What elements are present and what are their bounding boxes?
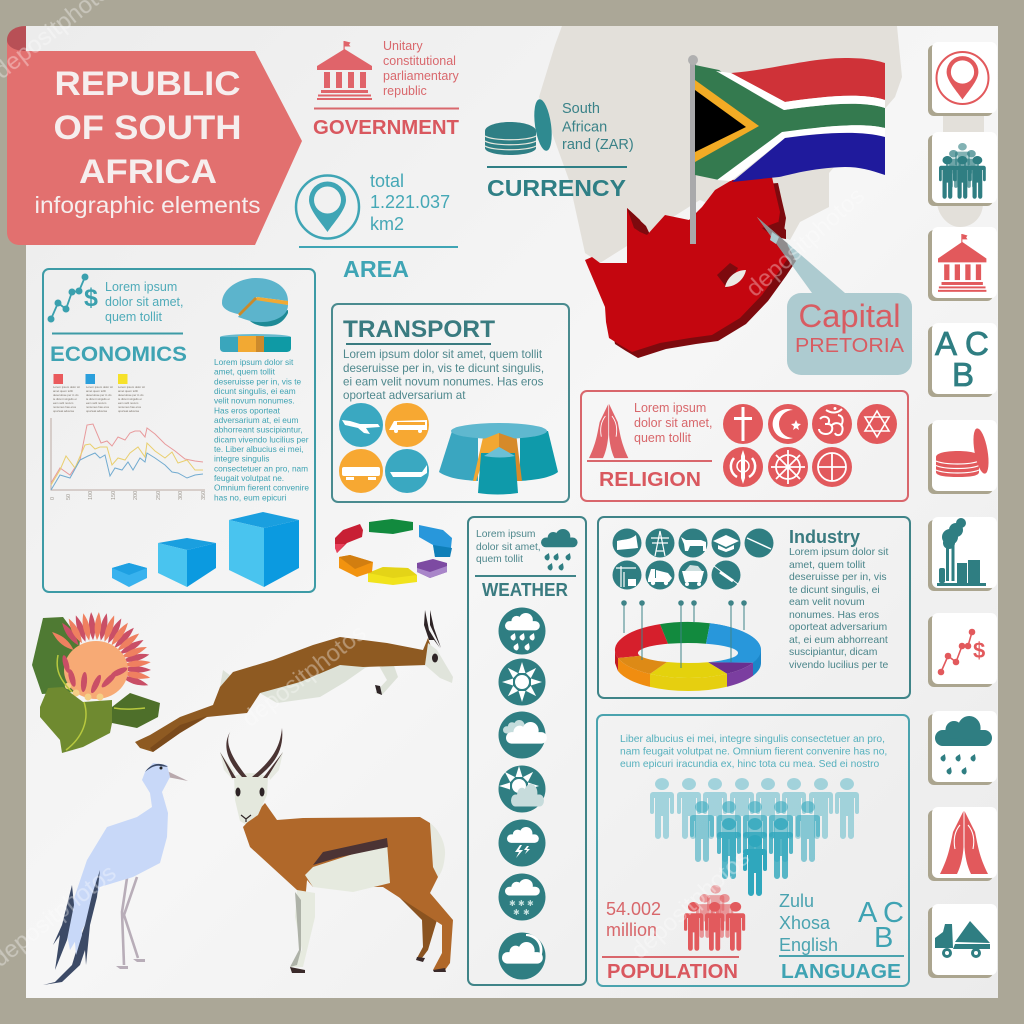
economics body text: deseruisse per in, vis te	[214, 376, 302, 386]
icon: growth graph with dollar	[48, 274, 98, 322]
icon: snow: ✱	[523, 908, 530, 917]
icon: red people	[684, 885, 745, 951]
callout: capital Pretoria	[757, 217, 912, 375]
chart legend: te dicunt singulis ei	[53, 397, 77, 401]
side tab: economics	[928, 613, 997, 687]
drum diagram	[439, 423, 558, 494]
economics body text: amet, quem tollit	[214, 367, 276, 377]
side tab: government	[928, 227, 997, 301]
icon: circle cross	[812, 447, 852, 487]
population text: eum epicuri iracundia ex, hinc tota cu mea. Sed ei nostro	[620, 759, 880, 770]
heading: religion: RELIGION	[599, 469, 701, 491]
heading: government: GOVERNMENT	[313, 117, 459, 139]
economics body text: Has eros oporteat	[214, 405, 281, 415]
economics body text: integre singulis	[214, 454, 269, 464]
heading: language: LANGUAGE	[781, 961, 901, 983]
icon: power pylon	[646, 528, 674, 558]
economics body text: has no, eum epicuri	[214, 492, 287, 502]
heading: industry: Industry	[789, 527, 860, 547]
currency description: African	[562, 120, 607, 136]
line chart: 350	[201, 491, 207, 500]
grey map of southern Africa	[539, 26, 984, 263]
title banner: REPUBLIC	[54, 65, 240, 103]
side tab: language: C	[965, 325, 989, 362]
icon: snow: ✱	[509, 899, 516, 908]
economics body text: Omnium fierent convenire	[214, 483, 309, 493]
heading: currency: CURRENCY	[487, 175, 626, 201]
line chart: 0	[50, 497, 56, 500]
callout: capital Pretoria: PRETORIA	[795, 335, 905, 357]
standing springbok	[220, 728, 453, 973]
title banner: AFRICA	[79, 153, 217, 191]
heading: transport: TRANSPORT	[343, 316, 495, 343]
line chart: 150	[111, 491, 117, 500]
chart legend: amet quem tollit	[118, 389, 138, 393]
heading: area: AREA	[343, 256, 409, 282]
industry text: deseruisse per in, vis	[789, 572, 887, 583]
economics body text: te. Liber albucius ei mei,	[214, 444, 303, 454]
side tab: language: B	[952, 356, 974, 393]
icon: growth graph with dollar: $	[84, 284, 98, 312]
government description: republic	[383, 84, 427, 98]
icon: khanda	[723, 447, 763, 487]
industry text: at, ei eum abhorreant	[789, 635, 888, 646]
industry text: te dicunt singulis, ei	[789, 585, 880, 596]
industry text: nonumes. Has eros	[789, 610, 879, 621]
heading: weather: WEATHER	[482, 580, 568, 600]
icon: om	[812, 404, 852, 444]
icon: airplane	[339, 403, 383, 447]
chart legend: eam velit novum	[86, 401, 107, 405]
chart legend: amet quem tollit	[86, 389, 106, 393]
icon: syringe	[712, 560, 740, 590]
side tab: area	[928, 42, 997, 116]
industry text: oporteat adversarium	[789, 622, 887, 633]
line chart	[50, 418, 207, 500]
icon: crescent and star	[768, 404, 808, 444]
icon: location pin	[296, 176, 359, 238]
icon: graduation cap	[712, 528, 740, 558]
watermarks: depositphotos	[741, 182, 870, 302]
icon: snow: ✱	[527, 899, 534, 908]
currency description: rand (ZAR)	[562, 137, 634, 153]
title banner: infographic elements	[34, 192, 260, 218]
icon: dump truck	[646, 560, 674, 590]
economics body text: dicunt singulis, ei eam	[214, 386, 296, 396]
chart legend: eam velit novum	[53, 401, 74, 405]
icon: letters A C B: C	[883, 897, 904, 929]
icon: star of David	[857, 404, 897, 444]
area value: km2	[370, 214, 404, 234]
side tab: religion	[928, 807, 997, 881]
icon: snow: ✱	[513, 908, 520, 917]
chart legend: nonumes has eros	[86, 405, 110, 409]
icon: thunderstorm	[498, 820, 546, 866]
panel: weather	[468, 517, 586, 985]
3D cube bars	[112, 512, 299, 587]
religion text: Lorem ipsum	[634, 401, 706, 415]
religion text: dolor sit amet,	[634, 416, 713, 430]
side tab: currency	[928, 420, 997, 494]
line chart: 300	[178, 491, 184, 500]
economics body text: adversarium at, ei eum	[214, 415, 298, 425]
icon: coins	[485, 98, 555, 155]
panel: transport	[332, 304, 569, 502]
blue crane	[43, 763, 188, 985]
weather intro text: dolor sit amet,	[476, 542, 541, 553]
side tab: language	[928, 323, 997, 397]
chart legend: nonumes has eros	[118, 405, 142, 409]
weather intro text: Lorem ipsum	[476, 529, 536, 540]
economics intro text: dolor sit amet,	[105, 295, 184, 309]
icon: rain	[498, 608, 546, 654]
icon: snow: ✱	[518, 899, 525, 908]
pins	[622, 601, 746, 668]
panel: economics	[43, 269, 315, 592]
chart legend	[53, 374, 145, 413]
economics intro text: Lorem ipsum	[105, 280, 177, 294]
icon: dharma wheel	[768, 447, 808, 487]
economics body text: consectetuer an pro, nam	[214, 463, 308, 473]
currency description: South	[562, 101, 600, 117]
economics body text: velit novum nonumes.	[214, 396, 295, 406]
transport text: oporteat adversarium at	[343, 389, 466, 402]
line chart: 50	[66, 494, 72, 500]
title banner	[7, 26, 302, 245]
people pyramid	[650, 778, 859, 896]
government description: Unitary	[383, 39, 423, 53]
government block	[313, 39, 459, 139]
side tab: weather	[928, 711, 997, 785]
watermarks: depositphotos	[626, 844, 755, 964]
side tab: mining truck	[928, 904, 997, 978]
industry text: amet, quem tollit	[789, 560, 865, 571]
icon: bus	[385, 403, 429, 447]
chart legend: eam velit novum	[118, 401, 139, 405]
population number: 54.002	[606, 899, 661, 919]
flagpole	[688, 55, 698, 244]
flower: king protea	[32, 612, 160, 753]
religion text: quem tollit	[634, 431, 691, 445]
weather intro text: quem tollit	[476, 554, 523, 565]
area value: total	[370, 171, 404, 191]
3D ring chart	[615, 601, 761, 691]
icon: letters A C B: B	[874, 922, 893, 954]
panel: population and language	[597, 715, 909, 986]
heading: population: POPULATION	[607, 961, 738, 983]
panel: industry	[598, 517, 910, 698]
population text: nam feugait volutpat ne. Omnium fierent convenire has no,	[620, 746, 887, 758]
leaping springbok	[135, 610, 453, 752]
language list: Zulu	[779, 891, 814, 911]
chart legend: amet quem tollit	[53, 389, 73, 393]
chart legend: nonumes has eros	[53, 405, 77, 409]
side tab: population	[928, 132, 997, 206]
icon: sun and cloud	[498, 766, 546, 812]
pie chart	[222, 278, 288, 326]
side tab: language: A	[935, 325, 957, 362]
chart legend: oporteat adversa	[118, 409, 139, 413]
South African flag	[695, 58, 885, 182]
chart legend: Lorem ipsum dolor sit	[53, 385, 80, 389]
economics intro text: quem tollit	[105, 310, 162, 324]
transport text: Lorem ipsum dolor sit amet, quem tollit	[343, 348, 543, 361]
icon: coal pile	[612, 528, 642, 558]
chart legend: deseruisse per in vis	[86, 393, 112, 397]
chart legend: deseruisse per in vis	[118, 393, 144, 397]
heading: economics: ECONOMICS	[50, 343, 187, 366]
icon: mine cart	[678, 560, 708, 590]
economics body text: abhorreant suscipiantur,	[214, 425, 303, 435]
icon: clouds	[498, 712, 547, 758]
government description: parliamentary	[383, 69, 459, 83]
icon: cow	[678, 528, 708, 558]
industry text: eam velit novum	[789, 597, 865, 608]
transport text: ei eam velit novum nonumes. Has eros	[343, 376, 544, 388]
callout: capital Pretoria: Capital	[798, 298, 900, 334]
chart legend: te dicunt singulis ei	[86, 397, 110, 401]
language list: English	[779, 935, 838, 955]
population number: million	[606, 920, 657, 940]
icon: sun	[498, 658, 546, 706]
line chart: 250	[156, 491, 162, 500]
icon: snow	[498, 874, 546, 920]
icon: night cloud	[498, 932, 546, 980]
area block	[296, 171, 458, 282]
segmented ring chart	[335, 519, 452, 585]
transport text: deseruisse per in, vis te dicunt singulis,	[343, 362, 544, 375]
industry text: suscipiantur, dicam	[789, 647, 877, 658]
line chart: 200	[133, 491, 139, 500]
language list: Xhosa	[779, 913, 831, 933]
title banner: OF SOUTH	[54, 109, 242, 147]
economics body text: dicam vivendo lucilius per	[214, 434, 309, 444]
map: South Africa in red	[585, 177, 796, 358]
population text: Liber albucius ei mei, integre singulis consectetuer an pro,	[620, 734, 885, 745]
industry text: Lorem ipsum dolor sit	[789, 547, 888, 558]
chart legend: Lorem ipsum dolor sit	[118, 385, 145, 389]
government description: constitutional	[383, 54, 456, 68]
area value: 1.221.037	[370, 192, 450, 212]
economics body text: Lorem ipsum dolor sit	[214, 357, 294, 367]
line chart: 100	[88, 491, 94, 500]
side tab: economics: $	[973, 638, 985, 663]
watermarks: depositphotos	[237, 619, 371, 733]
icon: letters A C B: A	[858, 897, 878, 929]
drum chart	[220, 334, 291, 352]
side tab: industry	[928, 517, 997, 591]
icon: rain cloud	[541, 529, 578, 570]
icon: construction crane	[612, 560, 642, 590]
chart legend: Lorem ipsum dolor sit	[86, 385, 113, 389]
currency block	[485, 98, 634, 201]
chart legend: oporteat adversa	[53, 409, 74, 413]
chart legend: te dicunt singulis ei	[118, 397, 142, 401]
industry text: vivendo lucilius per te	[789, 660, 889, 671]
icon: rifle	[744, 528, 774, 558]
panel: religion	[581, 391, 908, 501]
chart legend: oporteat adversa	[86, 409, 107, 413]
icon: government building	[317, 41, 372, 100]
icon: cargo ship	[385, 449, 429, 493]
icon: cross	[723, 404, 763, 444]
icon: tanker train	[339, 449, 383, 493]
economics body text: feugait volutpat ne.	[214, 473, 284, 483]
icon: praying hands	[589, 404, 628, 458]
chart legend: deseruisse per in vis	[53, 393, 79, 397]
